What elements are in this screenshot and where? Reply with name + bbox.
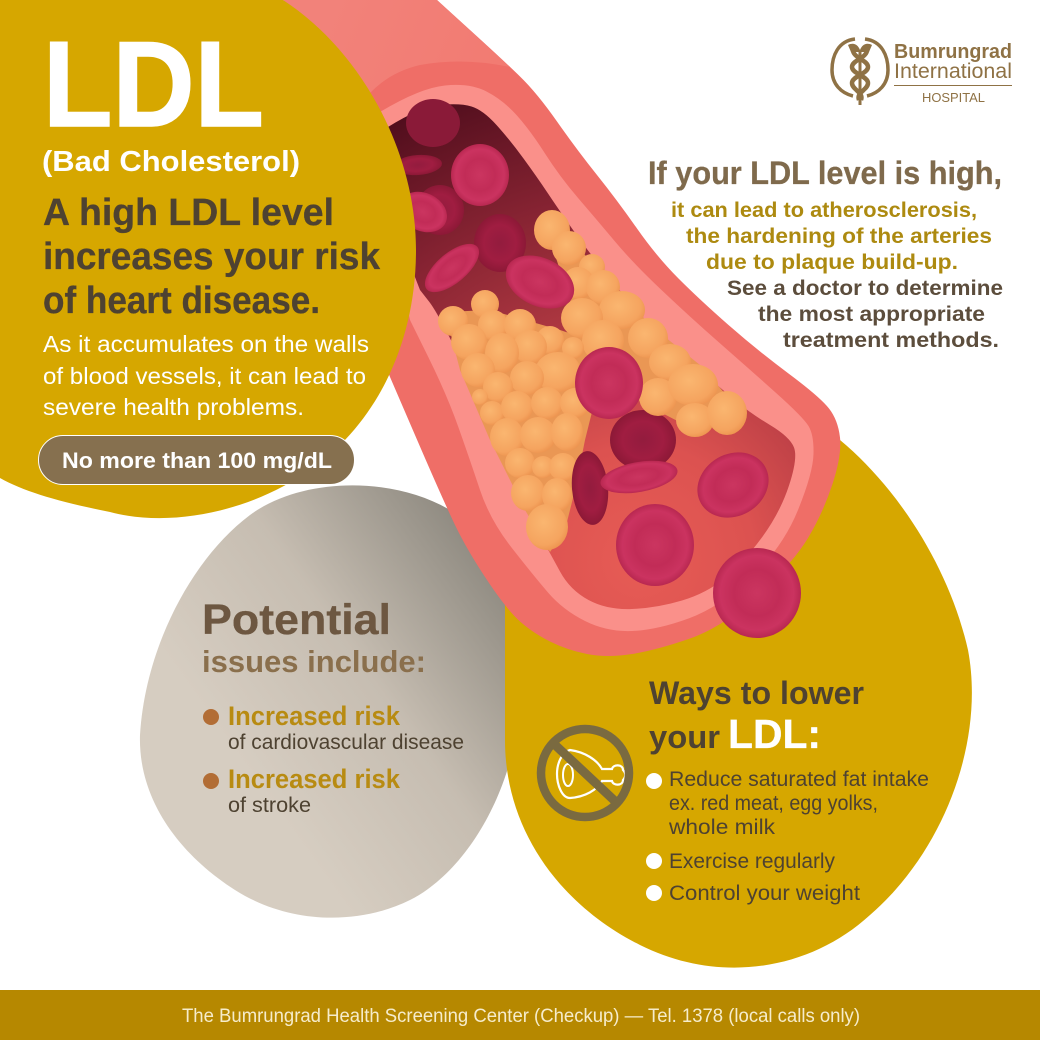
text block: atherosclerosis — [671, 198, 992, 274]
list item: cardiovascular risk — [203, 701, 464, 754]
artery outer rim — [300, 0, 840, 656]
text block: accumulation explanation — [43, 331, 369, 420]
illustration: artery with plaque and blood cells — [283, 0, 840, 656]
heading: ways to lower your LDL: LDL: — [728, 711, 821, 757]
list item: weight: Control your weight — [669, 882, 860, 905]
artery inner light ring — [380, 85, 814, 631]
text block: accumulation explanation: of blood vessels, it can lead to — [43, 363, 366, 389]
icon: escaping blood cell — [713, 548, 801, 638]
heading: if your LDL level is high: If your LDL level is high, — [648, 155, 1002, 191]
callout: LDL limit pill — [38, 436, 354, 484]
list item: reduce saturated fat: ex. red meat, egg yolks, — [669, 792, 878, 815]
text block: see a doctor: See a doctor to determine — [727, 276, 1003, 300]
panel: gold ways to lower blob — [505, 440, 972, 968]
callout: LDL limit pill: No more than 100 mg/dL — [62, 448, 332, 473]
text block: see a doctor: treatment methods. — [783, 328, 999, 352]
artery exterior top — [283, 0, 510, 93]
icon: no meat — [541, 729, 629, 817]
list item: stroke risk: of stroke — [228, 794, 311, 817]
fat globules — [438, 210, 747, 550]
list item: reduce saturated fat: whole milk — [668, 816, 776, 839]
text block: atherosclerosis: due to plaque build-up. — [706, 250, 958, 274]
heading: potential issues — [202, 596, 426, 679]
text block: high LDL statement: increases your risk — [43, 236, 381, 278]
text block: high LDL statement: A high LDL level — [43, 192, 334, 234]
text block: high LDL statement: of heart disease. — [43, 280, 320, 322]
list item: reduce saturated fat — [646, 768, 929, 839]
subheading: bad cholesterol: (Bad Cholesterol) — [42, 146, 300, 178]
text block: accumulation explanation: As it accumulates on the walls — [43, 331, 369, 357]
heading: potential issues: issues include: — [202, 644, 426, 679]
text block: atherosclerosis: the hardening of the arteries — [686, 224, 992, 248]
text block: see a doctor — [727, 276, 1003, 352]
list item: stroke risk: Increased risk — [228, 764, 401, 794]
plaque base — [445, 215, 735, 552]
front blood cells — [392, 144, 781, 586]
panel: gold LDL intro blob — [0, 0, 416, 518]
logo: Bumrungrad International Hospital: HOSPITAL — [922, 90, 985, 105]
heading: LDL: LDL — [43, 16, 264, 152]
list item: cardiovascular risk: of cardiovascular disease — [228, 731, 464, 754]
logo: Bumrungrad International Hospital: International — [894, 60, 1012, 83]
list item: stroke risk — [203, 764, 401, 817]
panel: grey potential issues blob — [140, 485, 520, 918]
footer bar: The Bumrungrad Health Screening Center (Checkup) — Tel. 1378 (local calls only) — [182, 1006, 860, 1027]
artery lumen — [385, 104, 795, 609]
list item: exercise: Exercise regularly — [669, 850, 835, 873]
text block: accumulation explanation: severe health problems. — [43, 394, 304, 420]
list item: reduce saturated fat: Reduce saturated fat intake — [669, 768, 929, 791]
text block: see a doctor: the most appropriate — [758, 302, 985, 326]
text block: atherosclerosis: it can lead to atherosclerosis, — [671, 198, 977, 222]
logo: Bumrungrad International Hospital: Bumrungrad — [894, 41, 1012, 63]
heading: ways to lower your LDL: Ways to lower — [649, 675, 864, 711]
heading: potential issues: Potential — [202, 596, 391, 644]
list item: cardiovascular risk: Increased risk — [228, 701, 401, 731]
heading: ways to lower your LDL: your — [649, 719, 720, 755]
back blood cells — [393, 99, 676, 470]
logo: Bumrungrad International Hospital — [832, 39, 1012, 105]
text block: high LDL statement — [43, 192, 381, 322]
heading: ways to lower your LDL — [649, 675, 864, 757]
footer bar — [0, 990, 1040, 1040]
